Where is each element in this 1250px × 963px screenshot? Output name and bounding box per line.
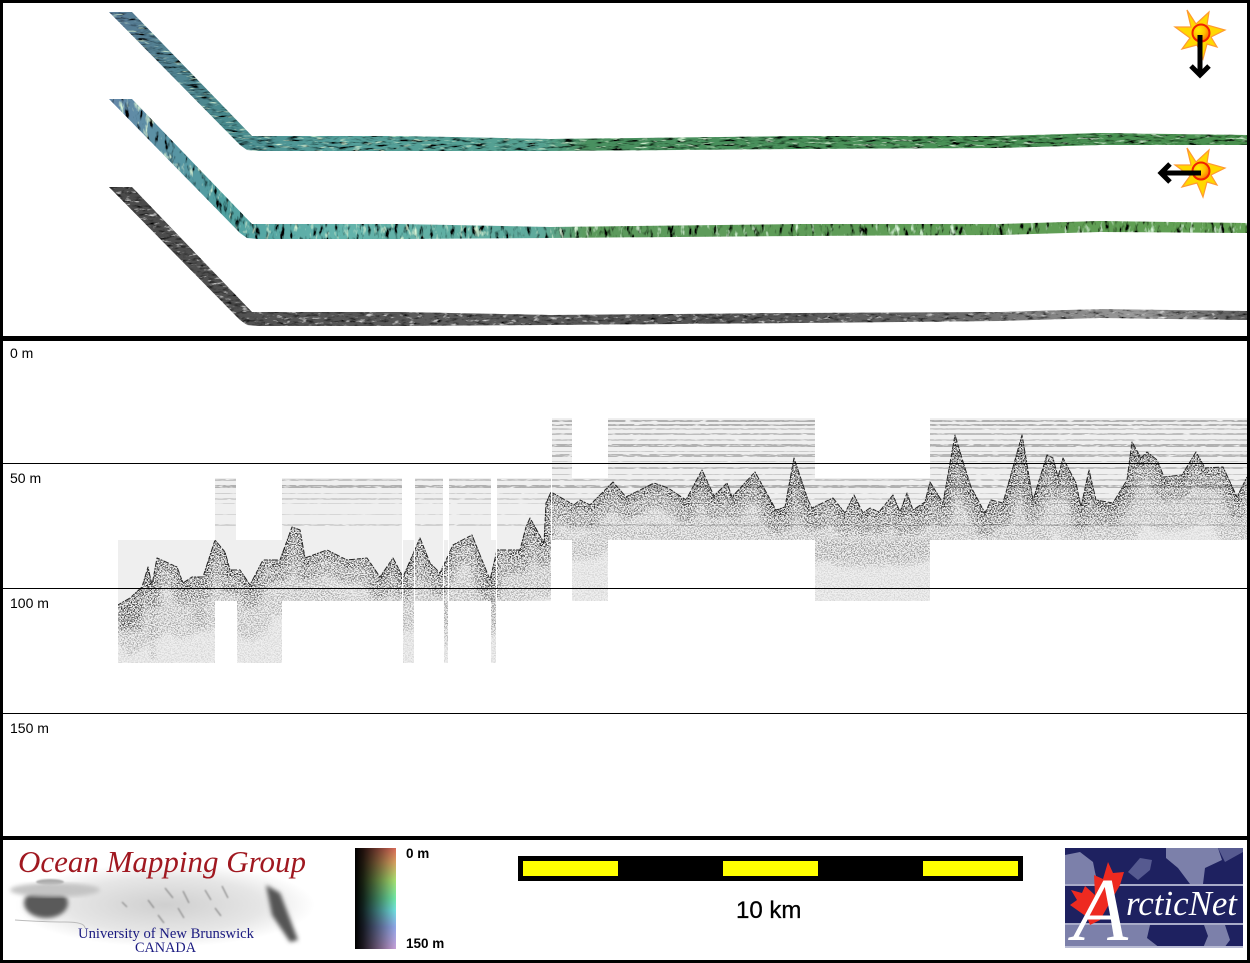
depth label: 100 m: 100 m [10, 595, 49, 611]
depth label: 0 m: 0 m [10, 345, 33, 361]
depth label: 150 m: 150 m [10, 720, 49, 736]
logo subtitle: university: University of New Brunswick [78, 926, 254, 942]
logo: Ocean Mapping Group [10, 844, 315, 956]
swath strip: bathymetry lit from north [109, 12, 1247, 151]
icon: red maple leaf [1070, 862, 1124, 925]
depth grid line: 100 m [3, 588, 1247, 589]
panel: sub-bottom echogram profile [3, 348, 1247, 733]
echogram: horizontal water-column noise stripes [118, 420, 1248, 526]
panel: footer with logos and legends [3, 840, 1247, 960]
logo: ArcticNet [1065, 848, 1243, 960]
logo title: Ocean Mapping Group [18, 844, 306, 879]
icon: sun with downward illumination arrow [1175, 10, 1225, 75]
swath strip: bathymetry lit from east [109, 99, 1247, 239]
logo initial A: A [1068, 861, 1129, 960]
colour bar label: 150 m: 150 m [406, 936, 444, 951]
depth grid line: 50 m [3, 463, 1247, 464]
logo subtitle: country: CANADA [135, 940, 196, 956]
panel: backscatter and sun-illuminated swath strips [3, 3, 1247, 336]
logo wordmark: rcticNet [1126, 884, 1238, 923]
colour bar label: 0 m: 0 m [406, 846, 429, 861]
depth label: 50 m: 50 m [10, 470, 41, 486]
depth grid line: 150 m [3, 713, 1247, 714]
echogram: seabed reflector and sub-bottom speckle [118, 435, 1247, 680]
scale bar label: 10 km [736, 897, 801, 924]
scale bar: 10 km [518, 856, 1023, 924]
swath strip: greyscale backscatter [109, 187, 1247, 326]
icon: sun with leftward illumination arrow [1161, 148, 1225, 197]
legend: depth colour bar [355, 846, 444, 951]
echogram: grey data blocks [118, 418, 1247, 663]
